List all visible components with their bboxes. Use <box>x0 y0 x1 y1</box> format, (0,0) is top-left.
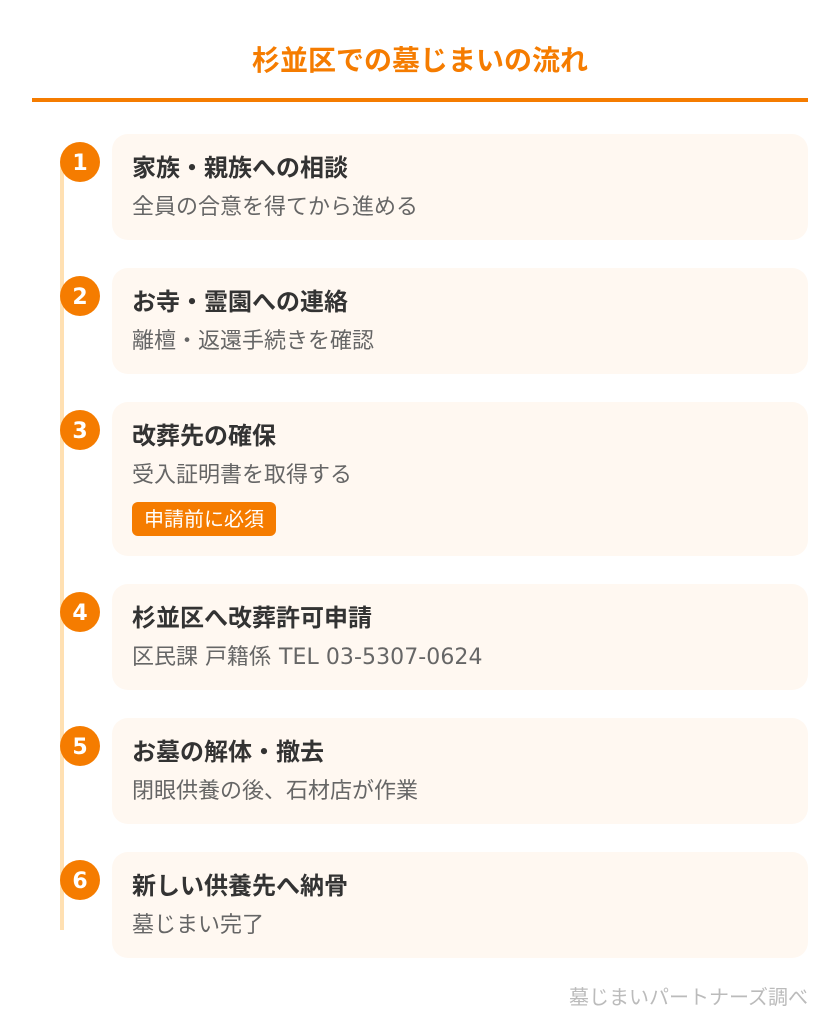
step 5 number: 5 <box>72 735 88 760</box>
step 6 description: 墓じまい完了 <box>132 913 264 938</box>
step 2 number: 2 <box>72 285 88 310</box>
step 1 heading: 家族・親族への相談 <box>132 154 348 182</box>
step 6 number: 6 <box>72 869 88 894</box>
step 2 number <box>60 276 100 316</box>
step 1 number: 1 <box>72 151 88 176</box>
step 1 description: 全員の合意を得てから進める <box>132 195 418 220</box>
step 6 card <box>112 852 808 958</box>
step 4 card <box>112 584 808 690</box>
step 3 badge: 申請前に必須 <box>144 507 264 531</box>
step 3 description: 受入証明書を取得する <box>132 463 352 488</box>
step 5 description: 閉眼供養の後、石材店が作業 <box>132 779 418 804</box>
step 6 heading: 新しい供養先へ納骨 <box>132 872 348 900</box>
step 3 heading: 改葬先の確保 <box>132 422 276 450</box>
step 5 card <box>112 718 808 824</box>
step 2 card <box>112 268 808 374</box>
step 2 heading: お寺・霊園への連絡 <box>132 288 348 316</box>
step 3 badge <box>132 502 276 536</box>
step 3 number <box>60 410 100 450</box>
step 3 number: 3 <box>72 419 88 444</box>
step 1 card <box>112 134 808 240</box>
step 6 number <box>60 860 100 900</box>
step 4 number: 4 <box>72 601 88 626</box>
step 5 number <box>60 726 100 766</box>
source note: 墓じまいパートナーズ調べ <box>569 985 808 1009</box>
step 5 heading: お墓の解体・撤去 <box>132 738 324 766</box>
timeline vertical line <box>60 162 64 930</box>
step 4 description: 区民課 戸籍係 TEL 03-5307-0624 <box>132 645 483 670</box>
step 4 heading: 杉並区へ改葬許可申請 <box>132 604 372 632</box>
step 3 card <box>112 402 808 556</box>
step 1 number <box>60 142 100 182</box>
step 2 description: 離檀・返還手続きを確認 <box>132 329 374 354</box>
title: 杉並区での墓じまいの流れ <box>252 44 588 77</box>
step 4 number <box>60 592 100 632</box>
